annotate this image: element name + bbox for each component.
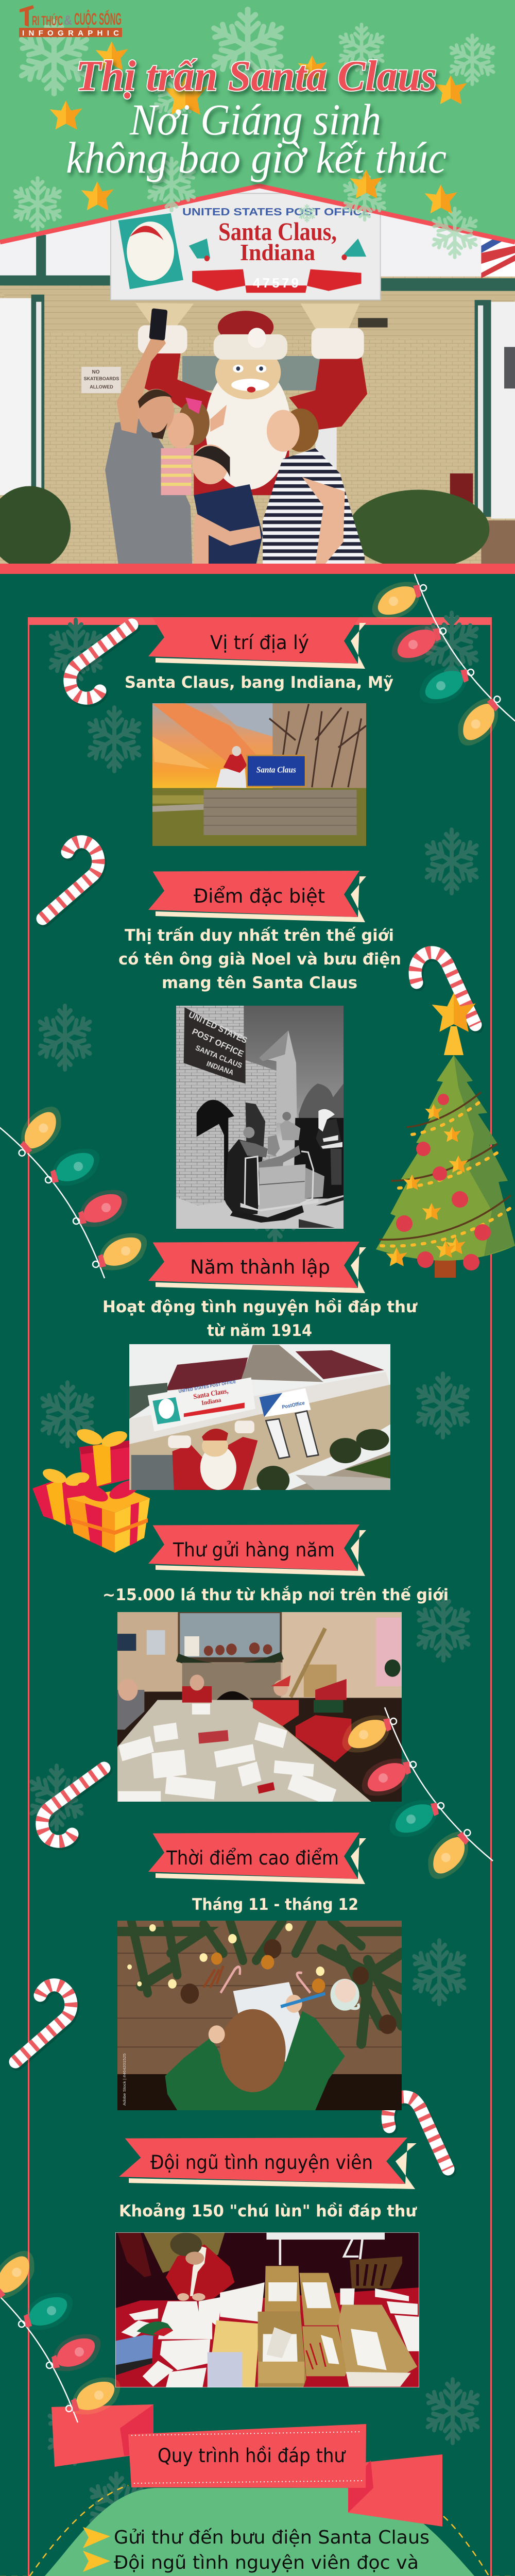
description: có tên ông già Noel và bưu điện	[118, 950, 401, 969]
red roof line	[0, 186, 515, 242]
description: Thị trấn duy nhất trên thế giới	[125, 926, 394, 945]
logo top: &	[64, 12, 72, 28]
candy cane	[15, 1985, 73, 2064]
candy cane	[388, 2097, 450, 2171]
string of lights	[342, 1707, 493, 1883]
leaf-shaped panel	[44, 2488, 475, 2576]
ribbon heading	[148, 1524, 366, 1576]
ribbon heading: process	[52, 2404, 442, 2527]
process steps text	[89, 2527, 430, 2576]
photo: volunteers at a table	[117, 1612, 402, 1802]
candy cane	[42, 1768, 106, 1843]
dashed yellow outline	[0, 2485, 515, 2576]
ribbon heading: Thư gửi hàng năm	[173, 1539, 335, 1561]
ribbon heading: Vị trí địa lý	[210, 632, 309, 654]
photo: post office with Santa statue	[129, 1344, 390, 1490]
section: special point	[118, 871, 401, 1229]
ribbon heading: process: Quy trình hồi đáp thư	[158, 2445, 346, 2467]
ribbon heading	[119, 2138, 417, 2189]
ribbon heading: Thời điểm cao điểm	[166, 1847, 339, 1869]
section: peak period	[117, 1833, 402, 2110]
header green roof shape	[0, 0, 515, 242]
frame top band	[28, 617, 492, 625]
description: ~15.000 lá thư từ khắp nơi trên thế giới	[102, 1586, 449, 1604]
infographic canvas: CUỘC SỐNG	[74, 10, 122, 28]
logo top: RI THỨC	[32, 13, 63, 28]
section: reply process	[0, 2404, 515, 2576]
photo: child writing a letter	[117, 1921, 402, 2110]
logo top	[19, 5, 122, 38]
description: Hoạt động tình nguyện hồi đáp thư	[102, 1298, 418, 1316]
yellow arrow bullets	[83, 2527, 209, 2576]
photo: post office with Santa statue: UNITED STATES POST OFFICE	[178, 1379, 236, 1394]
section: founded year	[102, 1242, 418, 1495]
candy cane	[70, 625, 133, 700]
process steps text: Gửi thư đến bưu điện Santa Claus	[114, 2527, 430, 2548]
photo: post office with Santa statue: Santa Claus,	[193, 1386, 229, 1401]
photo: historic post office: UNITED STATES	[187, 1010, 249, 1045]
header photo: family selfie with Santa statue	[0, 186, 515, 569]
section: volunteer team	[115, 2138, 419, 2387]
photo: post office with Santa statue: Indiana	[201, 1396, 221, 1406]
title line 1: Thị trấn Santa Claus	[76, 52, 437, 100]
photo sign lettering: Indiana	[240, 239, 315, 265]
photo sign lettering: 47579	[253, 275, 299, 291]
candy cane	[415, 953, 477, 1027]
description: từ năm 1914	[207, 1321, 312, 1340]
title line 3: không bao giờ kết thúc	[66, 133, 447, 182]
location text: Santa Claus, bang Indiana, Mỹ	[125, 673, 393, 692]
photo: child writing a letter: Adobe Stock | #464201525	[122, 2053, 127, 2106]
section: letters per year	[102, 1524, 449, 1806]
photo: historic post office: SANTA CLAUS	[194, 1043, 244, 1070]
photo sign lettering: SKATEBOARDS	[84, 376, 119, 381]
photo sign lettering	[84, 207, 371, 389]
gift boxes	[32, 1426, 150, 1553]
ribbon heading: Năm thành lập	[190, 1256, 330, 1278]
red bar under header	[0, 564, 515, 574]
string of lights	[372, 574, 515, 749]
header gold stars	[50, 41, 467, 213]
description	[102, 1298, 418, 1340]
photo: welcome sign at sunset	[152, 703, 366, 846]
background snowflakes	[22, 613, 495, 2576]
logo top: INFOGRAPHIC	[22, 29, 119, 38]
photo: historic post office	[176, 1006, 344, 1229]
title line 2: Nơi Giáng sinh	[129, 95, 381, 144]
title	[66, 52, 447, 182]
string of lights	[0, 1103, 147, 1278]
photo sign lettering: ALLOWED	[90, 384, 113, 389]
ribbon heading: Điểm đặc biệt	[194, 885, 325, 907]
photo sign lettering: NO	[92, 369, 100, 375]
description	[118, 926, 401, 992]
ribbon heading	[148, 1242, 366, 1293]
photo: post office with Santa statue: PostOffice	[282, 1400, 305, 1410]
photo: historic post office: INDIANA	[205, 1059, 235, 1077]
christmas tree	[376, 993, 515, 1278]
description: Khoảng 150 "chú lùn" hồi đáp thư	[119, 2202, 417, 2221]
header snowflakes	[12, 9, 497, 258]
photo: welcome sign at sunset: Santa Claus	[256, 766, 296, 774]
candy cane	[43, 842, 100, 921]
photo: boxes of letters	[115, 2232, 419, 2387]
ribbon heading	[148, 617, 366, 669]
string of lights	[0, 2247, 120, 2422]
ribbon heading	[148, 1833, 366, 1884]
section: location	[125, 617, 393, 846]
months text: Tháng 11 - tháng 12	[192, 1895, 358, 1914]
photo sign lettering: Santa Claus,	[218, 217, 337, 246]
ribbon heading	[148, 871, 366, 922]
ribbon heading: Đội ngũ tình nguyện viên	[150, 2151, 373, 2174]
description: mang tên Santa Claus	[162, 974, 357, 992]
process steps text: Đội ngũ tình nguyện viên đọc và	[114, 2552, 419, 2573]
content frame	[29, 623, 491, 2576]
photo sign lettering: UNITED STATES POST OFFICE	[182, 207, 371, 218]
photo: historic post office: POST OFFICE	[191, 1026, 245, 1059]
